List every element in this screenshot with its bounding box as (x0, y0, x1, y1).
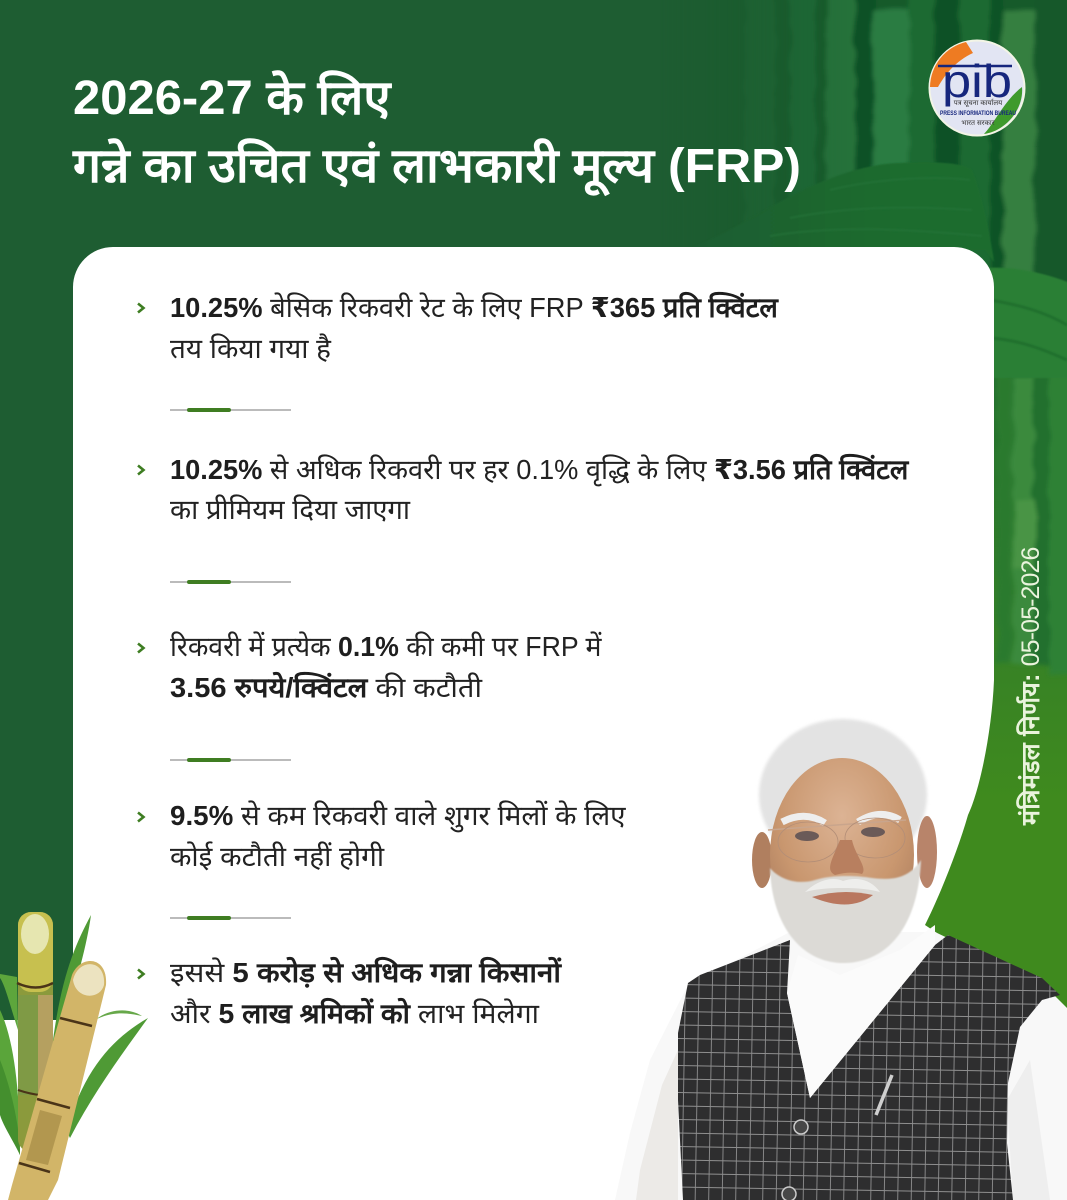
divider (170, 916, 291, 920)
eyebrows (782, 814, 900, 823)
mouth (812, 892, 873, 905)
large leaf behind header (693, 162, 994, 262)
logo: PIB: पत्र सूचना कार्यालय (954, 98, 1003, 107)
title (72, 70, 801, 196)
dark green left and header base (0, 0, 1067, 300)
bullet 5: और 5 लाख श्रमिकों को लाभ मिलेगा (170, 998, 539, 1029)
waistcoat (678, 935, 1060, 1200)
title: गन्ने का उचित एवं लाभकारी मूल्य (FRP) (73, 140, 801, 193)
beard (770, 860, 921, 963)
logo: PIB: भारत सरकार (961, 120, 995, 127)
tan stalk (8, 961, 106, 1200)
sugarcane illustration (0, 912, 148, 1200)
leaves (0, 915, 148, 1155)
divider (170, 580, 291, 584)
bullet 1 (137, 292, 779, 364)
bullet 5: इससे 5 करोड़ से अधिक गन्ना किसानों (170, 957, 561, 988)
bullet 2 (137, 454, 910, 525)
bullet 2: का प्रीमियम दिया जाएगा (170, 494, 410, 525)
logo: PIB: pib (942, 55, 1012, 107)
mustache (805, 879, 880, 892)
bullet 1: तय किया गया है (170, 333, 331, 364)
bullet 3: रिकवरी में प्रत्येक 0.1% की कमी पर FRP में (170, 631, 602, 662)
bullet 1: 10.25% बेसिक रिकवरी रेट के लिए FRP ₹365 प्रति क्विंटल (170, 292, 778, 323)
divider (170, 408, 291, 412)
bullet 4: 9.5% से कम रिकवरी वाले शुगर मिलों के लिए (170, 800, 626, 831)
logo: PIB (928, 40, 1026, 136)
bullet 5 (137, 956, 562, 1029)
bullet 3: 3.56 रुपये/क्विंटल की कटौती (170, 672, 482, 703)
right side strip (900, 360, 1067, 1040)
bullet 3 (137, 631, 602, 703)
hair (759, 719, 927, 871)
bullet 2: 10.25% से अधिक रिकवरी पर हर 0.1% वृद्धि के लिए ₹3.56 प्रति क्विंटल (170, 454, 908, 485)
bullet 4: कोई कटौती नहीं होगी (170, 841, 384, 872)
shirt sleeves and body (615, 932, 1067, 1200)
right strip leaf (985, 268, 1067, 378)
ears (752, 816, 937, 888)
portrait (636, 718, 1067, 1200)
shirt placket and collar (787, 925, 935, 1098)
face (770, 758, 914, 952)
vertical date label: मंत्रिमंडल निर्णय: 05-05-2026 (1017, 547, 1045, 825)
buttons (782, 1120, 808, 1200)
sugarcane field backdrop (802, 0, 1038, 272)
white glow (748, 710, 932, 970)
bullet 4 (137, 800, 626, 872)
divider (170, 758, 291, 762)
pen (876, 1075, 892, 1115)
white card (73, 247, 1067, 1200)
title: 2026-27 के लिए (73, 72, 390, 125)
eyes and glasses (768, 818, 906, 862)
nose (830, 840, 864, 875)
green stalk (17, 912, 53, 1152)
